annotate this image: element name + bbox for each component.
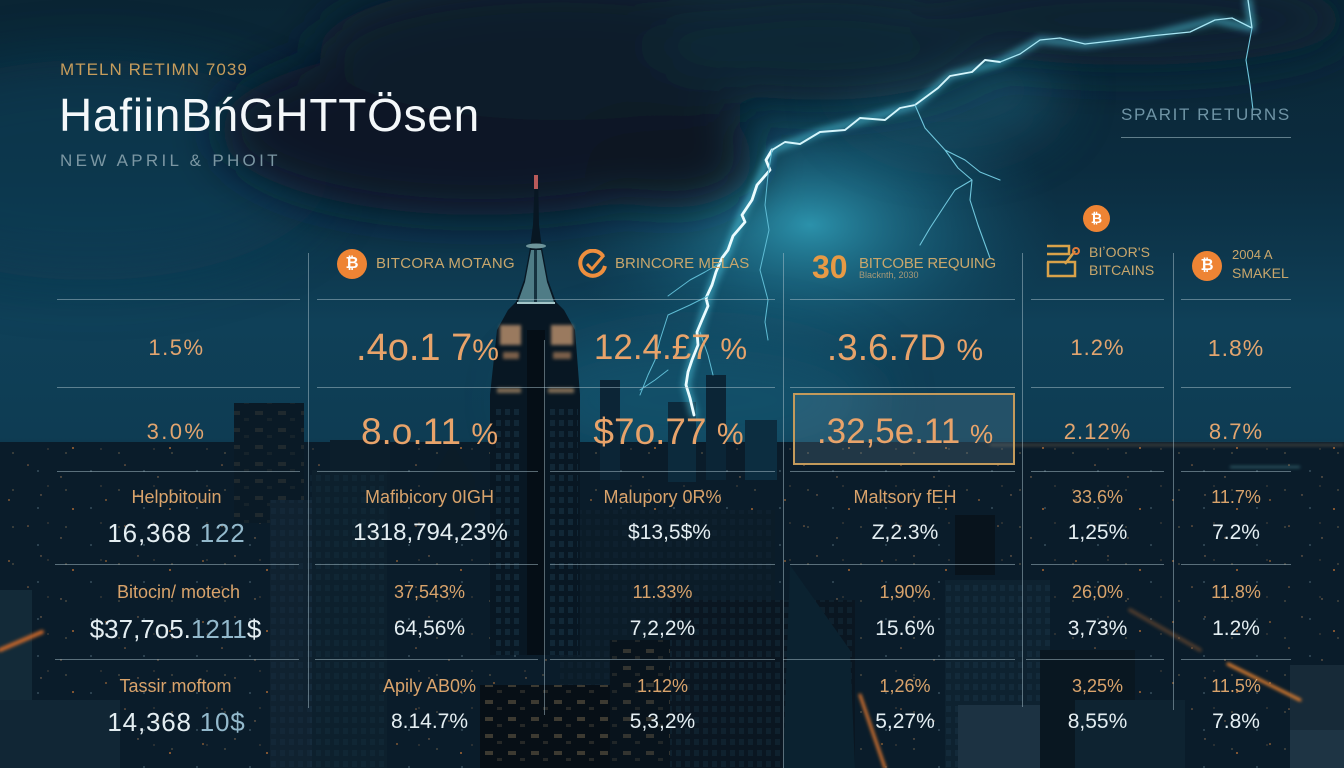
icon: small coin with laurel: ₿ [1091, 210, 1102, 226]
column 5: 33.6% [1072, 487, 1123, 507]
column 2: 1318,794,23% [353, 519, 508, 546]
skyline buildings [0, 375, 1344, 768]
column 1: Helpbitouin [131, 487, 222, 507]
column 3: 7,2,2% [630, 617, 695, 640]
eyebrow: MTELN RETIMN 7039 [60, 60, 248, 79]
column 6: 1.2% [1212, 617, 1260, 640]
column 4: 15.6% [875, 617, 935, 640]
column 6 [1208, 335, 1264, 733]
column 2: 37,543% [394, 582, 465, 602]
column 5 [1064, 335, 1131, 733]
column 2: 64,56% [394, 617, 465, 640]
lightning bolt [640, 0, 1253, 415]
header: bitcoin's bitcains: BITCAINS [1089, 262, 1154, 278]
column 3: 5,3,2% [630, 710, 695, 733]
column 6: 11.7% [1211, 487, 1261, 507]
icon: bitcoin coin [1192, 251, 1222, 281]
header: 2004 smakel: 2004 A [1232, 247, 1272, 262]
column 4: .3.6.7D % [827, 327, 983, 368]
column 3: 12.4.£7 % [594, 328, 747, 367]
column 4 [817, 327, 993, 733]
column 5: 8,55% [1068, 710, 1127, 733]
icon: bitcoin coin: ₿ [1200, 257, 1214, 274]
column 4: Maltsory fEH [853, 487, 957, 507]
column 3 [593, 328, 747, 733]
column 4: 1,90% [879, 582, 931, 602]
column 2: Apily AB0% [383, 676, 476, 696]
top right label: SPARIT RETURNS [1121, 105, 1291, 124]
column 5: 3,25% [1072, 676, 1123, 696]
header: 30 bitcoin requing: BITCOBE REQUING [859, 255, 996, 272]
column 6: 7.8% [1212, 710, 1260, 733]
column 1: 3.0% [147, 419, 206, 444]
header: bitcoin's bitcains: BIʼOOR'S [1089, 244, 1150, 260]
column 1: Tassir moftom [119, 676, 232, 696]
column 3: 11.33% [633, 582, 692, 602]
column 4: Z,2.3% [872, 521, 938, 544]
column 6: 1.8% [1208, 335, 1264, 361]
storm clouds [220, 0, 1344, 215]
icon: small coin with laurel [1083, 205, 1110, 232]
header: 2004 smakel: SMAKEL [1232, 265, 1289, 281]
column 3: $7o.77 % [593, 411, 744, 452]
column 6: 11.5% [1211, 676, 1261, 696]
header: 30 bitcoin requing: Blacknth, 2030 [859, 270, 919, 280]
header: bitcoin's bitcains [1046, 244, 1154, 278]
header: bitcoin motang: BITCORA MOTANG [376, 255, 515, 272]
highlight box [793, 393, 1015, 465]
column 5: 2.12% [1064, 419, 1131, 444]
column 2 [353, 327, 508, 733]
column 3: $13,5$% [628, 521, 711, 544]
column 6: 7.2% [1212, 521, 1260, 544]
column 6: 11.8% [1211, 582, 1261, 602]
column 6: 8.7% [1209, 419, 1263, 444]
column 2: 8.14.7% [391, 710, 468, 733]
column 2: Mafibicory 0IGH [365, 487, 494, 507]
icon: check ring [578, 249, 607, 278]
subtitle: NEW APRIL & PHOIT [60, 151, 281, 170]
distant city with lights [0, 442, 1344, 768]
column 1: 16,368 122 [107, 518, 246, 548]
central skyscraper [490, 175, 580, 655]
column 4: .32,5e.11 % [817, 412, 993, 451]
header: brincore melas [578, 249, 749, 278]
header: 2004 smakel [1192, 247, 1289, 281]
column 4: 1,26% [879, 676, 931, 696]
column 3: Malupory 0R% [603, 487, 722, 507]
column headers [337, 205, 1289, 285]
column 1 [90, 335, 261, 737]
column 1: Bitocin/ motech [117, 582, 240, 602]
icon: toolbox [1046, 244, 1080, 278]
column 5: 3,73% [1068, 617, 1127, 640]
column 5: 1,25% [1068, 521, 1127, 544]
header: bitcoin motang [337, 249, 515, 279]
column 2: 8.o.11 % [361, 411, 498, 452]
column 1: 1.5% [148, 335, 205, 360]
title: HafiinBńGHTTÖsen [59, 89, 480, 141]
column 1: $37,7o5.1211$ [90, 614, 261, 644]
icon: bitcoin coin [337, 249, 367, 279]
header: 30 bitcoin requing [812, 249, 996, 285]
column 5: 26,0% [1072, 582, 1123, 602]
street light streaks [0, 578, 1300, 768]
header: 30 bitcoin requing: 30 [812, 249, 848, 285]
icon: bitcoin coin: ₿ [345, 255, 359, 272]
column 3: 1.12% [637, 676, 688, 696]
column 5: 1.2% [1070, 335, 1125, 360]
header: brincore melas: BRINCORE MELAS [615, 255, 749, 272]
column 4: 5,27% [875, 710, 935, 733]
column 1: 14,368 10$ [107, 707, 246, 737]
column 2: .4o.1 7% [356, 327, 499, 369]
